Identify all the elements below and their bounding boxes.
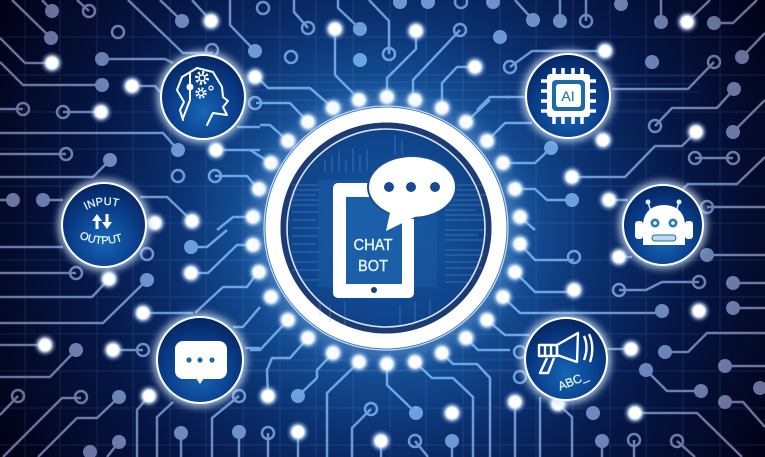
speech bubble bbox=[367, 155, 457, 231]
circuit texture inside hub bbox=[292, 135, 486, 325]
icon: megaphone bbox=[521, 314, 611, 404]
tablet: BOT bbox=[358, 258, 388, 275]
icon: AI chip: AI bbox=[561, 88, 575, 104]
icon: input output bbox=[52, 173, 155, 276]
icon: AI head bbox=[157, 51, 249, 143]
icon: robot bbox=[619, 181, 707, 269]
label: CHAT bbox=[354, 237, 393, 254]
central hub bbox=[258, 100, 514, 356]
dark inner ring bbox=[280, 122, 492, 334]
icon: input output: OUTPUT bbox=[80, 232, 121, 244]
icon: chat message bbox=[153, 313, 247, 407]
icon: megaphone: ABC_ bbox=[556, 369, 590, 393]
icon: input output: INPUT bbox=[83, 197, 120, 210]
arrows bbox=[92, 214, 112, 229]
outer white ring bbox=[273, 115, 499, 341]
home button bbox=[371, 287, 377, 293]
tablet bbox=[333, 183, 414, 298]
icon: AI chip bbox=[522, 50, 614, 142]
